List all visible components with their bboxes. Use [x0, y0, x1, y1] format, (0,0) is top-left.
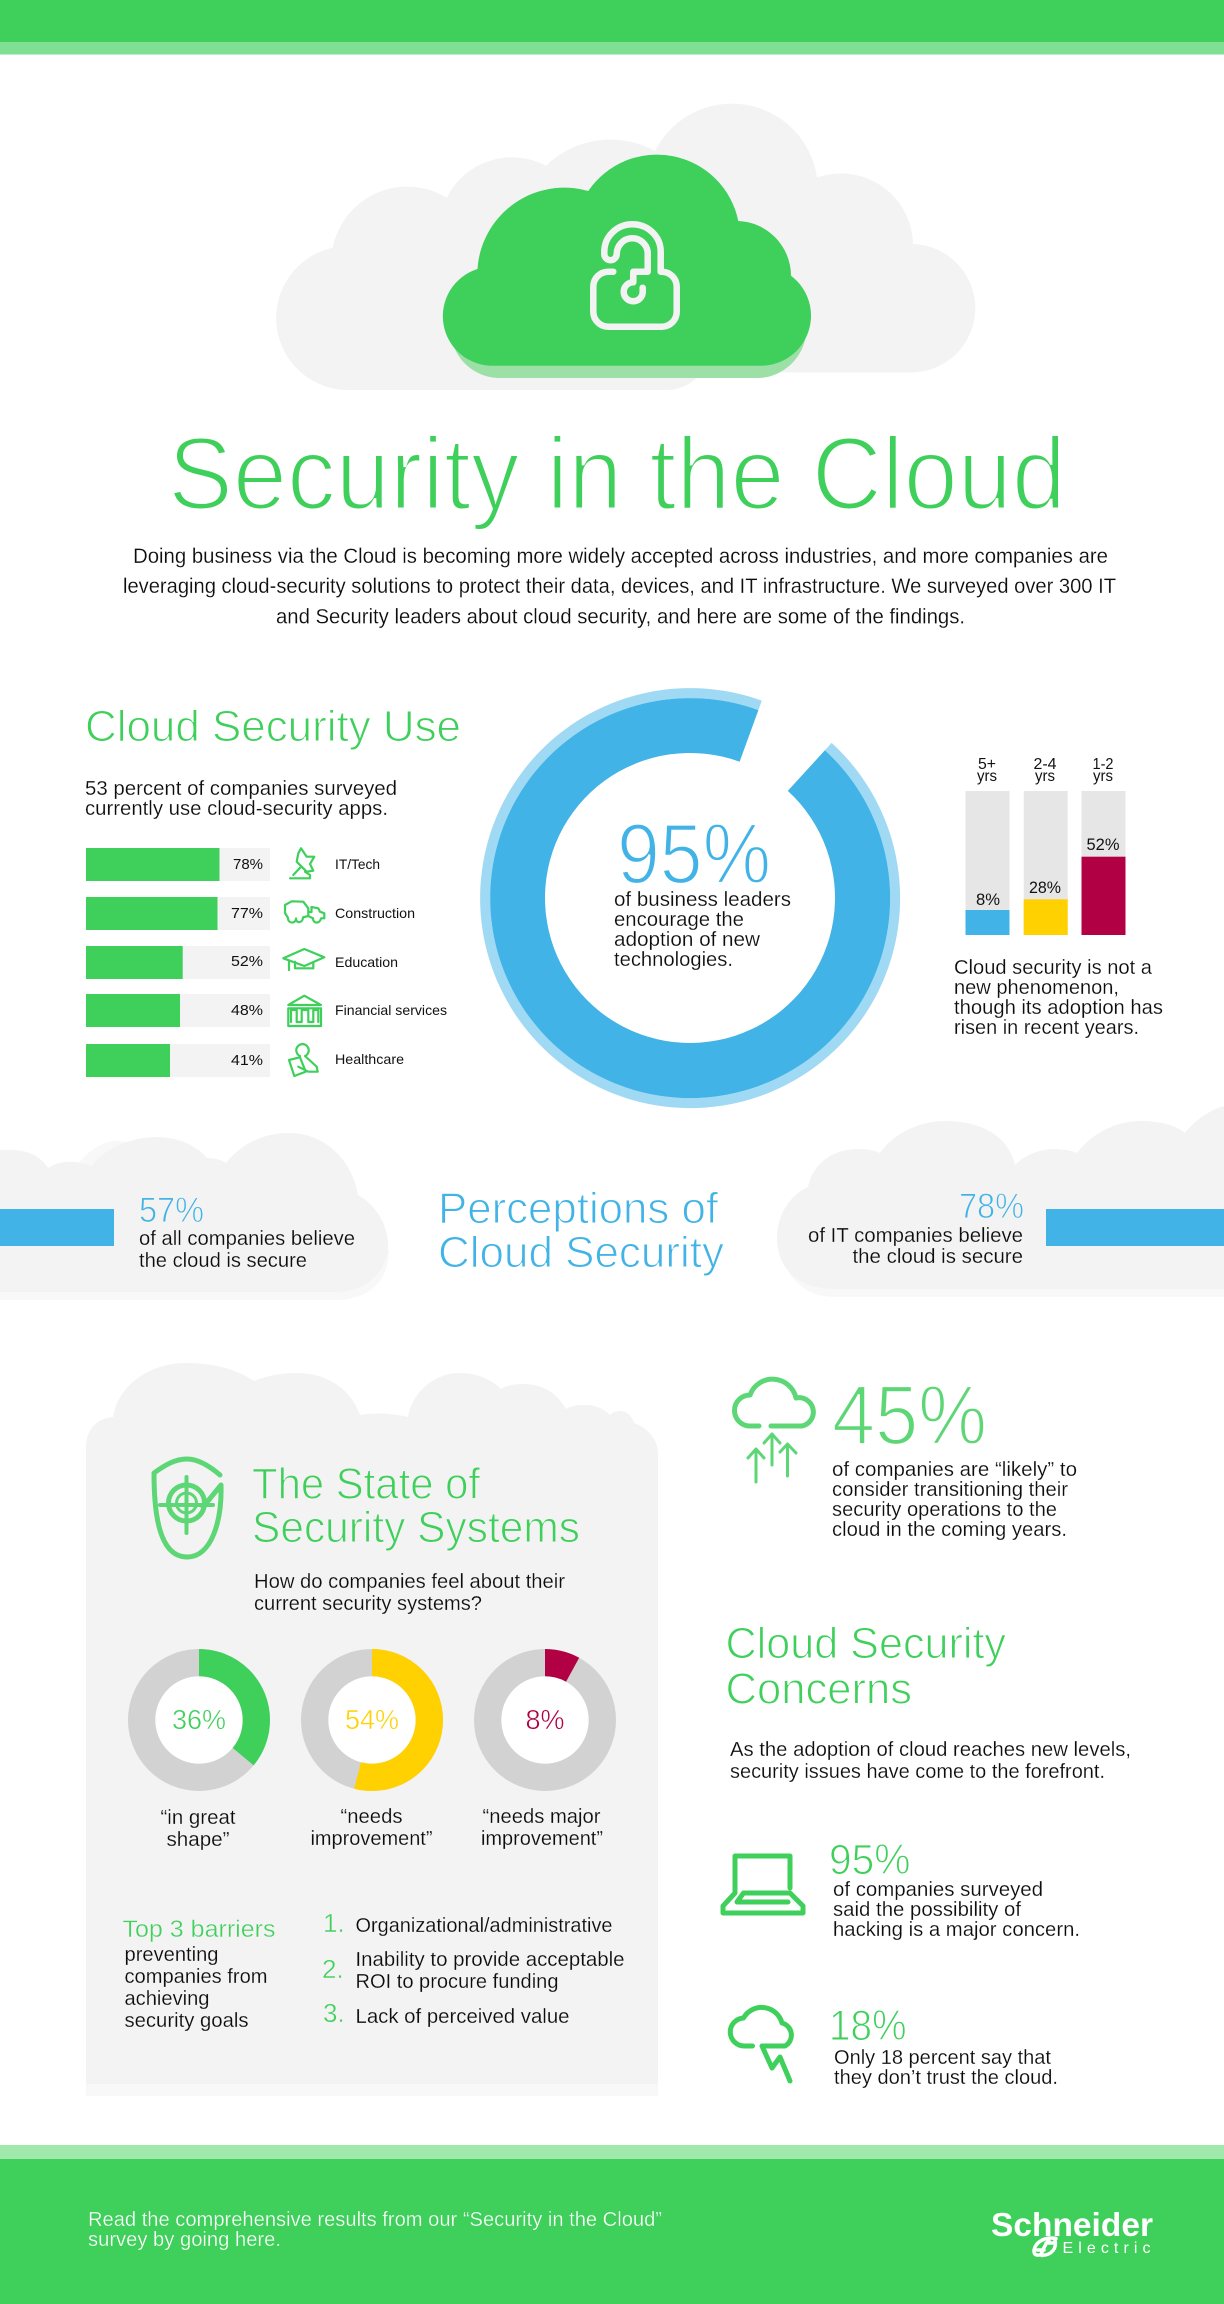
- text: cloud security not new: risen in recent years.: [954, 1017, 1139, 1039]
- text: footer call to action: Read the comprehensive results from our “Security in the Cloud”: [88, 2209, 662, 2231]
- text: cloud security not new: [954, 957, 1163, 1039]
- text: footer call to action: survey by going here.: [88, 2229, 281, 2251]
- text: cloud security not new: new phenomenon,: [954, 977, 1119, 999]
- list: top 3 barriers: Inability to provide acceptable: [356, 1949, 624, 1971]
- icon: concrete mixer truck: [285, 901, 324, 923]
- chart: adoption by years: 5+: [978, 756, 996, 773]
- text: hacking description: of companies surveyed: [833, 1879, 1043, 1901]
- donut captions: improvement”: [481, 1828, 603, 1850]
- chart: adoption by years: yrs: [1093, 768, 1113, 785]
- stat: 95% hacking: 95%: [829, 1836, 910, 1884]
- icon: satellite dish: [290, 848, 314, 878]
- list: top 3 barriers: 2.: [322, 1954, 344, 1984]
- text: all companies: the cloud is secure: [139, 1250, 307, 1272]
- text: all companies: [139, 1228, 355, 1272]
- text: question: current security systems?: [254, 1593, 482, 1615]
- text: trust description: Only 18 percent say that: [834, 2047, 1051, 2069]
- logo: schneider electric: Schneider: [991, 2206, 1153, 2243]
- chart: adoption by years: 52%: [1086, 835, 1120, 854]
- chart: 95% donut: [480, 688, 900, 1108]
- list: top 3 barriers: Lack of perceived value: [356, 2006, 570, 2028]
- text: IT companies: [808, 1225, 1023, 1268]
- text: 53 percent: [85, 778, 397, 820]
- panel: cloud security use: [85, 702, 461, 1077]
- text: business leaders: adoption of new: [614, 929, 761, 951]
- top banner: [0, 0, 1224, 54]
- donut captions: improvement”: [310, 1828, 432, 1850]
- icon: cloud with upload arrows: [734, 1379, 813, 1482]
- list: top 3 barriers: Organizational/administrative: [356, 1915, 612, 1937]
- text: IT companies: of IT companies believe: [808, 1225, 1023, 1247]
- text: barriers description: [124, 1944, 268, 2032]
- text: trust description: [834, 2047, 1058, 2089]
- bar chart: use by industry: 52%: [231, 953, 263, 970]
- intro paragraph: and Security leaders about cloud security, and here are some of the findings.: [276, 606, 965, 628]
- text: 45% description: [832, 1459, 1077, 1541]
- bar: 57%: [0, 1209, 114, 1246]
- icon: laptop: [723, 1856, 803, 1913]
- text: barriers description: achieving: [124, 1988, 210, 2010]
- heading: cloud security concerns: Concerns: [726, 1664, 912, 1714]
- text: question: [254, 1571, 565, 1615]
- text: footer call to action: [88, 2209, 662, 2251]
- icon: storm cloud: [730, 2007, 791, 2081]
- intro paragraph: Doing business via the Cloud is becoming more widely accepted across industries, and more companies are: [133, 545, 1108, 568]
- stat: 18%: 18%: [829, 2002, 906, 2050]
- chart: adoption by years: 8%: [976, 890, 1000, 909]
- stat: 57%: 57%: [139, 1191, 204, 1230]
- heading: state of security systems: The State of: [252, 1460, 481, 1508]
- donut captions: “needs major: [482, 1806, 601, 1828]
- text: all companies: of all companies believe: [139, 1228, 355, 1250]
- bar chart: use by industry: 48%: [231, 1002, 263, 1019]
- text: question: How do companies feel about their: [254, 1571, 565, 1593]
- heading: top 3 barriers: Top 3 barriers: [122, 1916, 276, 1943]
- text: IT companies: the cloud is secure: [852, 1246, 1023, 1268]
- footer band: [0, 2145, 1224, 2304]
- text: 53 percent: 53 percent of companies surveyed: [85, 778, 397, 800]
- donut captions: “needs: [340, 1806, 402, 1828]
- donut captions: “in great: [160, 1807, 236, 1829]
- icon: healthcare person: [289, 1044, 318, 1076]
- intro paragraph: [123, 545, 1116, 628]
- text: business leaders: encourage the: [614, 909, 744, 931]
- list: top 3 barriers: 1.: [323, 1908, 345, 1938]
- icon: graduation cap: [283, 949, 324, 970]
- text: 45% description: of companies are “likely” to: [832, 1459, 1077, 1481]
- heading: perceptions of cloud security: Cloud Security: [438, 1228, 724, 1277]
- heading: cloud security concerns: Cloud Security: [726, 1619, 1006, 1668]
- text: 53 percent: currently use cloud-security apps.: [85, 798, 388, 820]
- text: 45% description: consider transitioning their: [832, 1479, 1068, 1501]
- chart: adoption by years: 28%: [1029, 878, 1061, 897]
- industry labels: Healthcare: [335, 1051, 404, 1067]
- text: cloud security not new: Cloud security is not a: [954, 957, 1153, 979]
- intro paragraph: leveraging cloud-security solutions to protect their data, devices, and IT infrastructure. We surveyed over 300 IT: [123, 575, 1116, 598]
- heading: state of security systems: [252, 1460, 580, 1552]
- industry labels: [335, 856, 447, 1067]
- bar chart: use by industry: 77%: [231, 905, 263, 922]
- chart: adoption by years: 2-4: [1034, 756, 1057, 773]
- industry labels: Financial services: [335, 1002, 447, 1018]
- industry labels: IT/Tech: [335, 856, 380, 872]
- icon: bank building: [288, 996, 321, 1026]
- icon: open padlock: [593, 224, 677, 327]
- chart: 8% donut: [488, 1663, 602, 1777]
- panel: perceptions right cloud: [777, 1106, 1224, 1297]
- text: hacking description: [833, 1879, 1080, 1941]
- text: cloud security not new: though its adoption has: [954, 997, 1163, 1019]
- heading: state of security systems: Security Systems: [252, 1503, 580, 1552]
- text: business leaders: of business leaders: [614, 889, 791, 911]
- chart: 54% donut: [315, 1663, 429, 1777]
- list: top 3 barriers: ROI to procure funding: [356, 1971, 558, 1993]
- industry labels: Education: [335, 954, 398, 970]
- stat: 45%: 45%: [832, 1368, 987, 1462]
- bar: 78%: [1046, 1209, 1224, 1246]
- icon: shield with target: [154, 1459, 221, 1557]
- list: top 3 barriers: 3.: [323, 1998, 345, 2028]
- bar chart: use by industry: [86, 848, 270, 1077]
- stat: 78%: 78%: [959, 1187, 1024, 1226]
- text: 45% description: security operations to the: [832, 1499, 1057, 1521]
- list: top 3 barriers: [322, 1908, 624, 2028]
- chart: adoption by years: yrs: [1035, 768, 1055, 785]
- hero cloud illustration: [276, 104, 975, 390]
- industry labels: Construction: [335, 905, 415, 921]
- bar chart: use by industry: 41%: [231, 1052, 263, 1069]
- chart: adoption by years: yrs: [977, 768, 997, 785]
- heading: cloud security concerns: [726, 1619, 1006, 1714]
- panel: state of security systems: [86, 1363, 658, 2096]
- heading: perceptions of cloud security: [438, 1184, 724, 1277]
- logo: schneider electric: Electric: [1062, 2240, 1150, 2257]
- text: 45% description: cloud in the coming years.: [832, 1519, 1067, 1541]
- text: barriers description: security goals: [124, 2010, 248, 2032]
- chart: adoption by years: 1-2: [1092, 756, 1114, 773]
- stat: 95%: 95%: [617, 807, 771, 902]
- chart: 54% donut: 54%: [345, 1704, 399, 1735]
- text: business leaders: [614, 889, 791, 971]
- chart: adoption by years: [966, 756, 1126, 935]
- text: barriers description: companies from: [124, 1966, 268, 1988]
- text: concerns intro: [730, 1739, 1131, 1783]
- panel: perceptions left cloud: [0, 1133, 389, 1300]
- chart: 36% donut: 36%: [172, 1704, 226, 1735]
- chart: 8% donut: 8%: [526, 1704, 564, 1735]
- donut captions: shape”: [166, 1829, 230, 1851]
- bar chart: use by industry: 78%: [233, 856, 263, 873]
- text: hacking description: hacking is a major concern.: [833, 1919, 1080, 1941]
- text: business leaders: technologies.: [614, 949, 733, 971]
- heading: cloud security use: Cloud Security Use: [85, 702, 461, 751]
- text: concerns intro: security issues have come to the forefront.: [730, 1761, 1105, 1783]
- heading: perceptions of cloud security: Perceptions of: [438, 1184, 719, 1233]
- chart: 36% donut: [142, 1663, 256, 1777]
- donut captions: [160, 1806, 603, 1851]
- text: hacking description: said the possibility of: [833, 1899, 1021, 1921]
- text: barriers description: preventing: [124, 1944, 218, 1966]
- text: concerns intro: As the adoption of cloud reaches new levels,: [730, 1739, 1131, 1761]
- title: Security in the Cloud: [168, 416, 1066, 531]
- text: trust description: they don’t trust the cloud.: [834, 2067, 1058, 2089]
